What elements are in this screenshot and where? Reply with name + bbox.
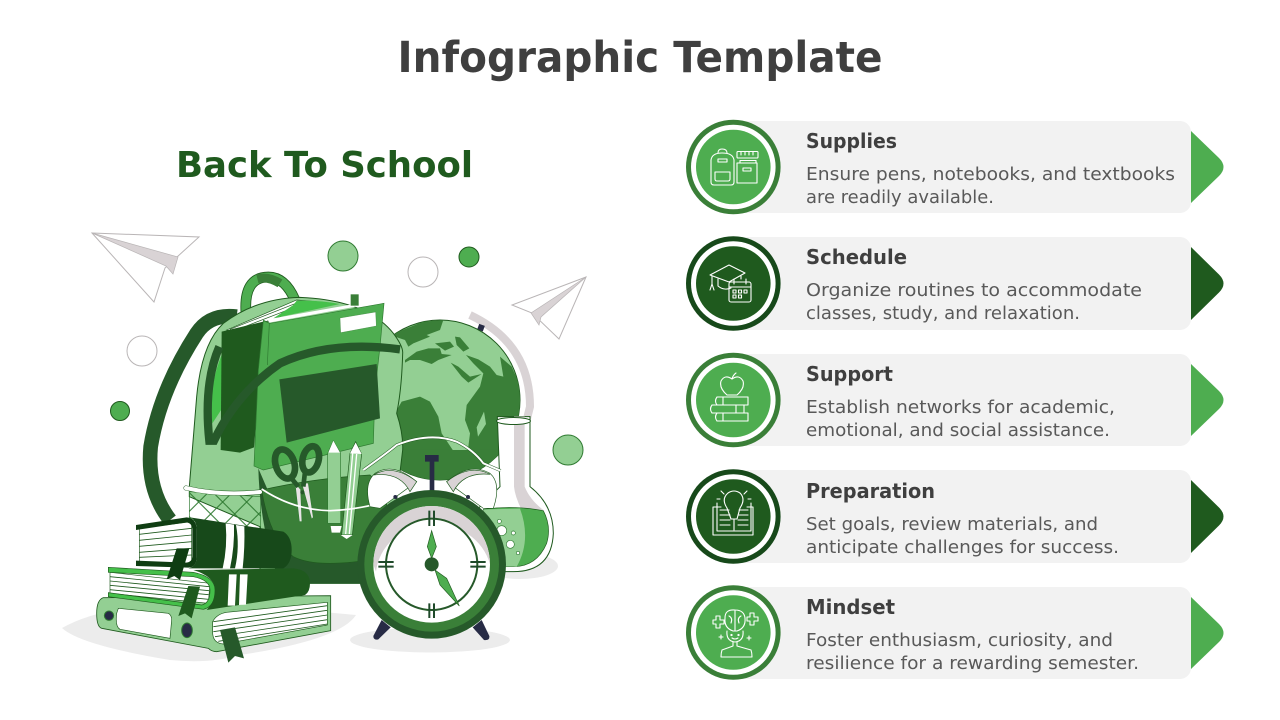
- heading: Mindset: [806, 595, 895, 619]
- description: are readily available.: [806, 187, 994, 208]
- left bell: [368, 469, 417, 508]
- icon badge: [686, 585, 781, 680]
- row: schedule: [686, 236, 1224, 331]
- icon badge: [686, 353, 781, 447]
- globe: [394, 312, 534, 480]
- icon: head with brain: [713, 610, 758, 657]
- bell frame: [363, 437, 501, 471]
- description: resilience for a rewarding semester.: [806, 653, 1139, 674]
- stacked books: [97, 517, 331, 663]
- description: Set goals, review materials, and: [806, 514, 1098, 535]
- heading: Supplies: [806, 129, 897, 153]
- lower pocket: [258, 468, 387, 583]
- ground shadows: [62, 553, 558, 661]
- flask: [470, 417, 553, 572]
- backpack strap: [150, 316, 237, 520]
- row: supplies: [686, 120, 1224, 214]
- white label: [340, 312, 376, 333]
- icon: open book with bulb: [713, 491, 753, 535]
- arrow: [1191, 597, 1224, 669]
- bright lining: [211, 355, 223, 423]
- panel: [733, 587, 1191, 679]
- row: support: [686, 353, 1224, 447]
- floating circles: [110, 241, 583, 465]
- curved strap: [208, 347, 400, 441]
- clock feet: [373, 620, 489, 640]
- description: Foster enthusiasm, curiosity, and: [806, 630, 1113, 651]
- description: Organize routines to accommodate: [806, 280, 1142, 301]
- clock body: [357, 490, 506, 639]
- green folder: [254, 303, 384, 470]
- bookmarks: [167, 548, 244, 663]
- middle book: [108, 567, 310, 610]
- description: Ensure pens, notebooks, and textbooks: [806, 164, 1175, 185]
- illustration: school supplies: [62, 233, 586, 663]
- backpack: [150, 277, 403, 583]
- right bell: [447, 469, 497, 508]
- pencil two: [341, 442, 362, 539]
- flask rim: [496, 418, 530, 424]
- panel: [733, 470, 1191, 563]
- arrow: [1191, 131, 1224, 203]
- heading: Preparation: [806, 479, 935, 503]
- icon: backpack and books: [711, 149, 758, 185]
- description: anticipate challenges for success.: [806, 537, 1119, 558]
- icon badge: [686, 236, 781, 331]
- white band: [186, 488, 260, 493]
- top pages: [227, 300, 317, 334]
- paper plane right: [512, 277, 586, 339]
- clock hammer: [425, 455, 439, 492]
- heading: Support: [806, 362, 893, 386]
- arrow: [1191, 480, 1224, 553]
- arrow: [1191, 364, 1224, 436]
- icon: cap and calendar: [710, 265, 751, 302]
- description: [806, 514, 1119, 558]
- panel: [733, 354, 1191, 446]
- icon badge: [686, 120, 781, 214]
- description: [806, 397, 1115, 441]
- clock hands: [427, 531, 459, 606]
- title: Infographic Template: [398, 33, 882, 83]
- heading: Schedule: [806, 245, 907, 269]
- description: classes, study, and relaxation.: [806, 303, 1080, 324]
- icon badge: [686, 469, 781, 564]
- dark book: [221, 322, 263, 453]
- row: preparation: [686, 469, 1224, 564]
- top book: [136, 517, 292, 568]
- heading: back to school: Back To School: [176, 145, 473, 186]
- paper plane left: [92, 233, 199, 302]
- rope: [262, 489, 380, 511]
- row: mindset: [686, 585, 1224, 680]
- clock ticks: [378, 511, 486, 618]
- description: [806, 280, 1142, 324]
- panel: [733, 121, 1191, 213]
- description: [806, 164, 1175, 208]
- panel: [733, 237, 1191, 330]
- backpack handle: [246, 277, 295, 313]
- dark window: [279, 364, 380, 443]
- description: [806, 630, 1139, 674]
- description: Establish networks for academic,: [806, 397, 1115, 418]
- icon: apple on books: [710, 373, 748, 421]
- scissors: [271, 444, 322, 522]
- bottom book: [97, 596, 331, 652]
- alarm clock: [357, 437, 506, 640]
- description: emotional, and social assistance.: [806, 420, 1110, 441]
- arrow: [1191, 247, 1224, 320]
- mesh pocket: [189, 492, 261, 530]
- backpack body: [189, 297, 403, 583]
- pencil one: [328, 441, 342, 533]
